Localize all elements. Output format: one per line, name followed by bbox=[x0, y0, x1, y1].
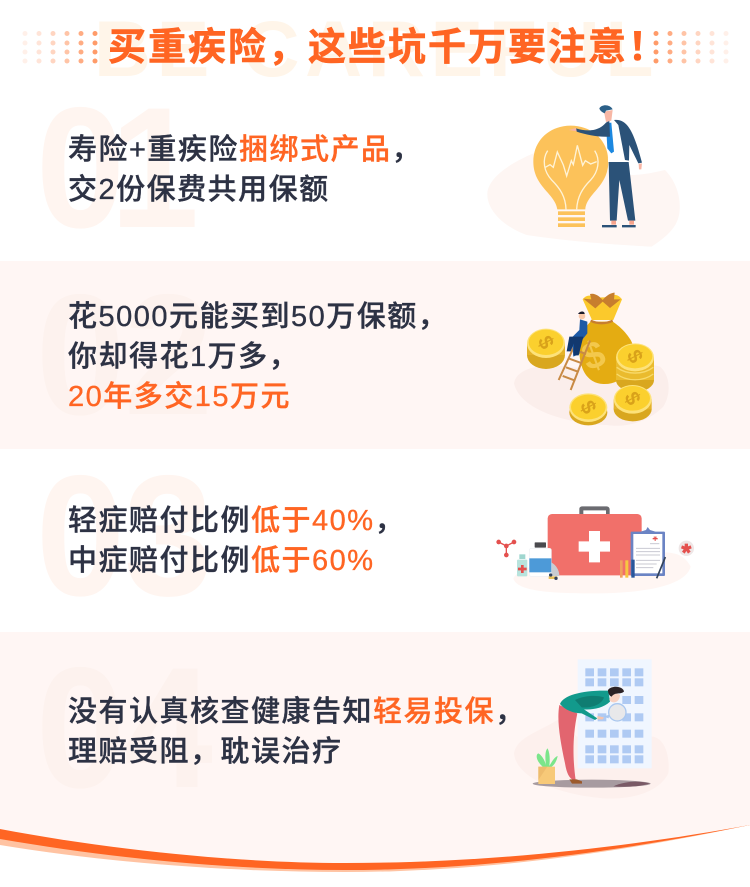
text: pitfall 2: 你却得花1万多， bbox=[68, 341, 299, 373]
title: 买重疾险，这些坑千万要注意！ bbox=[108, 27, 668, 69]
number 04: 04 bbox=[36, 632, 212, 824]
icon: light bulb and businessman bbox=[487, 105, 680, 247]
icon: first aid kit bbox=[496, 506, 694, 593]
icon: money bag and coins: $ bbox=[576, 332, 611, 380]
icon: money bag and coins: $ bbox=[622, 346, 648, 367]
text: pitfall 1: 寿险+重疾险捆绑式产品， bbox=[68, 134, 422, 166]
panel: row 2 background bbox=[0, 261, 750, 449]
decorative dots right bbox=[654, 31, 728, 64]
text: pitfall 1: 交2份保费共用保额 bbox=[68, 174, 330, 206]
text: pitfall 3: 轻症赔付比例低于40%， bbox=[68, 505, 405, 537]
icon: money bag and coins: $ bbox=[533, 332, 559, 353]
background word: BE CAREFUL bbox=[94, 4, 659, 93]
text: pitfall 4: 理赔受阻，耽误治疗 bbox=[68, 736, 343, 768]
number 02: 02 bbox=[36, 259, 212, 451]
text: pitfall 4: 没有认真核查健康告知轻易投保， bbox=[68, 696, 526, 728]
text: pitfall 2: 20年多交15万元 bbox=[68, 381, 291, 413]
text: pitfall 2 bbox=[68, 301, 448, 413]
text: pitfall 1 bbox=[68, 134, 422, 206]
text: pitfall 3: 中症赔付比例低于60% bbox=[68, 545, 375, 577]
icon: person inspecting building bbox=[514, 659, 669, 799]
text: pitfall 3 bbox=[68, 505, 405, 577]
icon: money bag and coins bbox=[514, 293, 669, 426]
text: pitfall 4 bbox=[68, 696, 526, 768]
panel: row 4 background bbox=[0, 632, 750, 802]
decorative dots left bbox=[22, 31, 98, 64]
icon: money bag and coins: $ bbox=[575, 397, 601, 418]
number 03: 03 bbox=[36, 440, 212, 632]
icon: money bag and coins: $ bbox=[619, 388, 645, 409]
number 01: 01 bbox=[36, 72, 184, 264]
text: pitfall 2: 花5000元能买到50万保额， bbox=[68, 301, 448, 333]
